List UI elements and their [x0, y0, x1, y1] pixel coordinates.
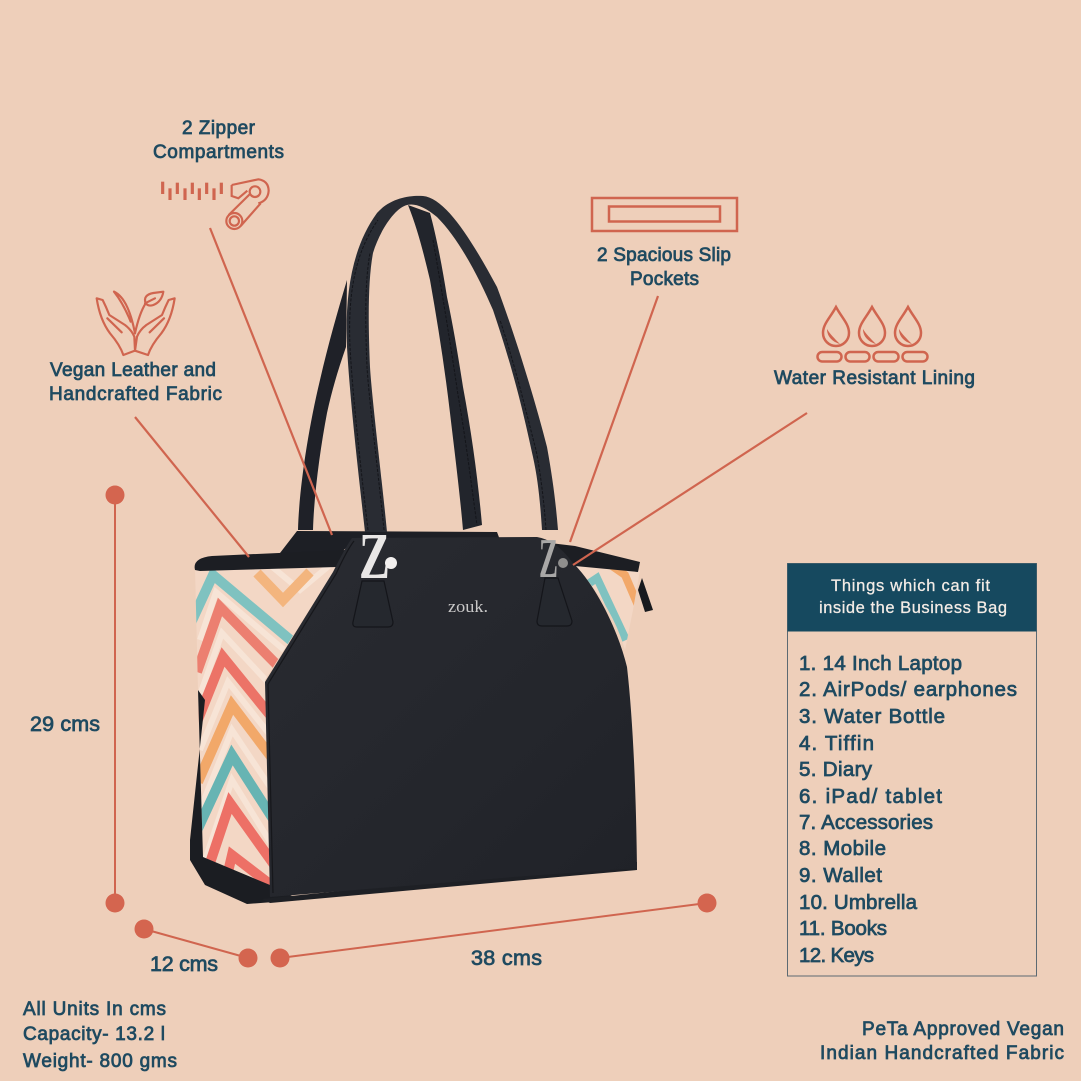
strap stitching	[350, 220, 546, 530]
panel header	[788, 564, 1036, 632]
bag photo illustration	[190, 196, 653, 904]
right handle tab	[537, 578, 572, 626]
icon: hands holding plant	[97, 292, 175, 355]
list of items	[799, 652, 1017, 967]
list of items: 4. Tiffin	[799, 732, 874, 755]
icon: zipper and pin	[163, 179, 269, 229]
list of items: 3. Water Bottle	[799, 705, 945, 728]
icon: water drops	[818, 307, 928, 362]
right fabric chevron side	[577, 566, 640, 648]
panel: things which can fit	[788, 564, 1036, 976]
heading: 2 zipper compartments: Compartments	[153, 142, 284, 163]
list of items: 7. Accessories	[799, 811, 933, 834]
heading: 2 spacious slip pockets	[597, 245, 731, 290]
text block: peta approved: PeTa Approved Vegan	[862, 1019, 1064, 1040]
callout line: water resistant lining	[573, 413, 807, 565]
zip tag	[638, 578, 653, 612]
front leather panel	[265, 537, 637, 897]
list of items: 6. iPad/ tablet	[799, 785, 942, 808]
right rim of bag opening	[550, 543, 640, 572]
front strap	[347, 196, 558, 532]
callout line: vegan leather	[135, 417, 249, 557]
list of items: 1. 14 Inch Laptop	[799, 652, 962, 675]
text block: units capacity weight	[23, 999, 177, 1072]
heading: vegan leather and handcrafted fabric: Vegan Leather and	[50, 360, 216, 381]
heading: 2 spacious slip pockets: Pockets	[630, 269, 699, 290]
back right strap	[408, 205, 482, 530]
text block: units capacity weight: Capacity- 13.2 l	[23, 1024, 165, 1045]
text block: units capacity weight: All Units In cms	[23, 999, 166, 1020]
heading: vegan leather and handcrafted fabric	[49, 360, 222, 405]
dimension: height 29 cms	[30, 486, 124, 912]
list of items: 10. Umbrella	[799, 891, 918, 914]
list of items: 8. Mobile	[799, 837, 886, 860]
bottom and side edging	[190, 690, 300, 904]
front panel seam	[268, 541, 354, 893]
dimension: height 29 cms: 29 cms	[30, 712, 100, 736]
right Z logo hardware: Z	[539, 528, 558, 590]
heading: 2 zipper compartments: 2 Zipper	[182, 118, 256, 139]
callout line: slip pockets	[570, 296, 658, 542]
list of items: 12. Keys	[799, 944, 874, 967]
panel header: inside the Business Bag	[819, 599, 1007, 617]
dimension: depth 12 cms: 12 cms	[150, 952, 218, 976]
left fabric chevron side	[195, 567, 336, 885]
heading: water resistant lining: Water Resistant Lining	[774, 368, 975, 389]
brand logo: zouk.	[448, 597, 488, 616]
left handle tab	[353, 581, 393, 627]
panel header: Things which can fit	[831, 577, 990, 595]
icon: slip pocket	[592, 198, 737, 231]
left rim of bag opening	[195, 550, 345, 571]
back left strap	[298, 280, 347, 530]
list of items: 5. Diary	[799, 758, 873, 781]
list of items: 2. AirPods/ earphones	[799, 678, 1017, 701]
dimension: width 38 cms	[270, 894, 716, 970]
text block: peta approved	[820, 1019, 1064, 1064]
heading: 2 zipper compartments	[153, 118, 284, 163]
heading: 2 spacious slip pockets: 2 Spacious Slip	[597, 245, 731, 266]
list of items: 11. Books	[799, 917, 887, 940]
heading: vegan leather and handcrafted fabric: Handcrafted Fabric	[49, 384, 222, 405]
bag base strip	[262, 862, 637, 903]
callout line: zipper compartments	[210, 228, 332, 535]
back panel of bag	[280, 531, 500, 553]
text block: peta approved: Indian Handcrafted Fabric	[820, 1043, 1064, 1064]
text block: units capacity weight: Weight- 800 gms	[23, 1051, 177, 1072]
left Z logo hardware: Z	[359, 520, 390, 593]
list of items: 9. Wallet	[799, 864, 882, 887]
dimension: width 38 cms: 38 cms	[471, 946, 542, 970]
dimension: depth 12 cms	[134, 920, 258, 976]
